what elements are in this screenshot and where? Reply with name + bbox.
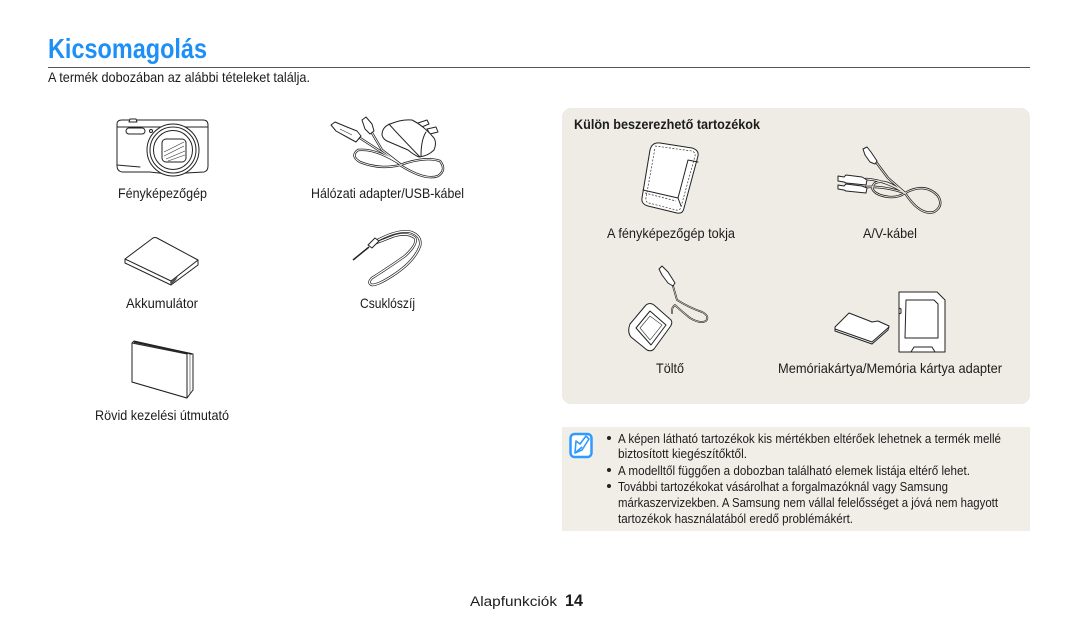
page number: 14 (565, 591, 584, 610)
label: charger: Töltő (656, 360, 684, 376)
icon: battery (125, 238, 198, 285)
icon: memory card and adapter (835, 292, 945, 352)
icon: camera case (642, 143, 698, 213)
intro text: A termék dobozában az alábbi tételeket találja. (48, 69, 310, 85)
label: adapter and USB cable: Hálózati adapter/USB-kábel (311, 185, 464, 201)
icon: quick start manual (132, 341, 193, 398)
note bullet 1 (607, 431, 1001, 461)
icon: camera (117, 119, 208, 176)
note bullet 1: biztosított kiegészítőktől. (618, 446, 747, 461)
label: camera case: A fényképezőgép tokja (607, 225, 735, 241)
label: battery: Akkumulátor (126, 295, 198, 311)
note bullet 3: További tartozékokat vásárolhat a forgalmazóknál vagy Samsung (618, 479, 948, 494)
note bullet 3 (607, 479, 998, 526)
footer section name: Alapfunkciók (470, 594, 557, 609)
note bullet 3: tartozékok használatából eredő problémákért. (618, 511, 853, 526)
panel: optional accessories (562, 108, 1030, 404)
label: memory card and adapter: Memóriakártya/Memória kártya adapter (778, 360, 1002, 376)
note bullet 3: márkaszervizekben. A Samsung nem vállal felelősséget a jóvá nem hagyott (618, 495, 998, 510)
label: camera: Fényképezőgép (118, 185, 207, 201)
label: quick start manual: Rövid kezelési útmutató (95, 407, 229, 423)
label: wrist strap: Csuklószíj (360, 295, 415, 311)
note bullet 2: A modelltől függően a dobozban található elemek listája eltérő lehet. (618, 463, 970, 478)
icon: adapter and USB cable (331, 117, 443, 177)
icon: AV cable (838, 147, 940, 213)
title: Kicsomagolás (48, 33, 207, 64)
panel: note (562, 427, 1030, 531)
note bullet 1: A képen látható tartozékok kis mértékben eltérőek lehetnek a termék mellé (618, 431, 1001, 446)
icon: charger (629, 266, 707, 351)
label: AV cable: A/V-kábel (863, 225, 917, 241)
icon: wrist strap (353, 231, 420, 285)
panel heading: Külön beszerezhető tartozékok (574, 116, 760, 132)
icon: note pencil (570, 434, 592, 457)
